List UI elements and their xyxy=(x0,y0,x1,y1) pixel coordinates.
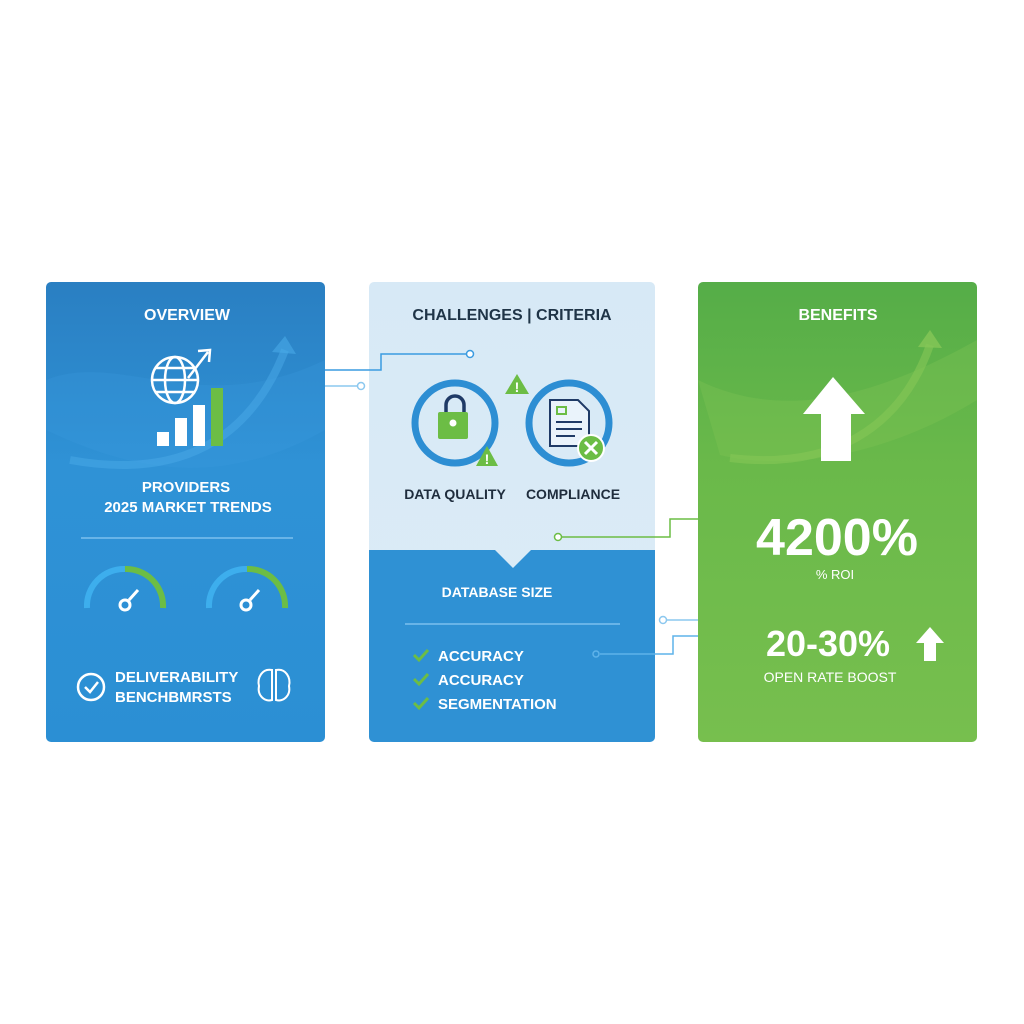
heading: benefits: BENEFITS xyxy=(798,307,878,324)
text: deliverability xyxy=(78,669,289,706)
text: deliverability: BENCHBMRSTS xyxy=(115,689,232,706)
labels: DATA QUALITY xyxy=(404,486,506,502)
list: criteria: ACCURACY xyxy=(438,648,524,665)
panel: challenges: COMPLIANCE xyxy=(526,486,620,502)
panel: challenges xyxy=(369,282,655,742)
icon: data quality xyxy=(415,383,498,467)
panel: benefits xyxy=(698,282,977,742)
stat: open rate xyxy=(764,623,944,685)
icon: big arrow xyxy=(803,377,865,461)
heading: challenges: CHALLENGES | CRITERIA xyxy=(412,307,612,324)
list: criteria: SEGMENTATION xyxy=(438,696,557,713)
panel: overview xyxy=(46,282,325,742)
stat: roi: 4200% xyxy=(756,509,918,567)
connectors xyxy=(325,350,698,657)
icon: compliance xyxy=(529,383,609,463)
panel: overview: 2025 MARKET TRENDS xyxy=(104,499,272,516)
stat: open rate: OPEN RATE BOOST xyxy=(764,669,897,685)
icon: data quality: ! xyxy=(485,451,489,467)
text: deliverability: DELIVERABILITY xyxy=(115,669,238,686)
heading: overview: OVERVIEW xyxy=(144,307,231,324)
heading: database size: DATABASE SIZE xyxy=(442,584,552,600)
list: criteria: ACCURACY xyxy=(438,672,524,689)
text: providers: PROVIDERS xyxy=(142,479,230,496)
panel: benefits: % ROI xyxy=(816,567,854,582)
icon: warning: ! xyxy=(515,379,519,395)
icon: warning xyxy=(505,374,529,395)
icon: globe chart xyxy=(152,350,223,446)
stat: open rate: 20-30% xyxy=(766,623,890,664)
icon: gauges xyxy=(87,569,285,610)
list: criteria xyxy=(414,648,557,713)
